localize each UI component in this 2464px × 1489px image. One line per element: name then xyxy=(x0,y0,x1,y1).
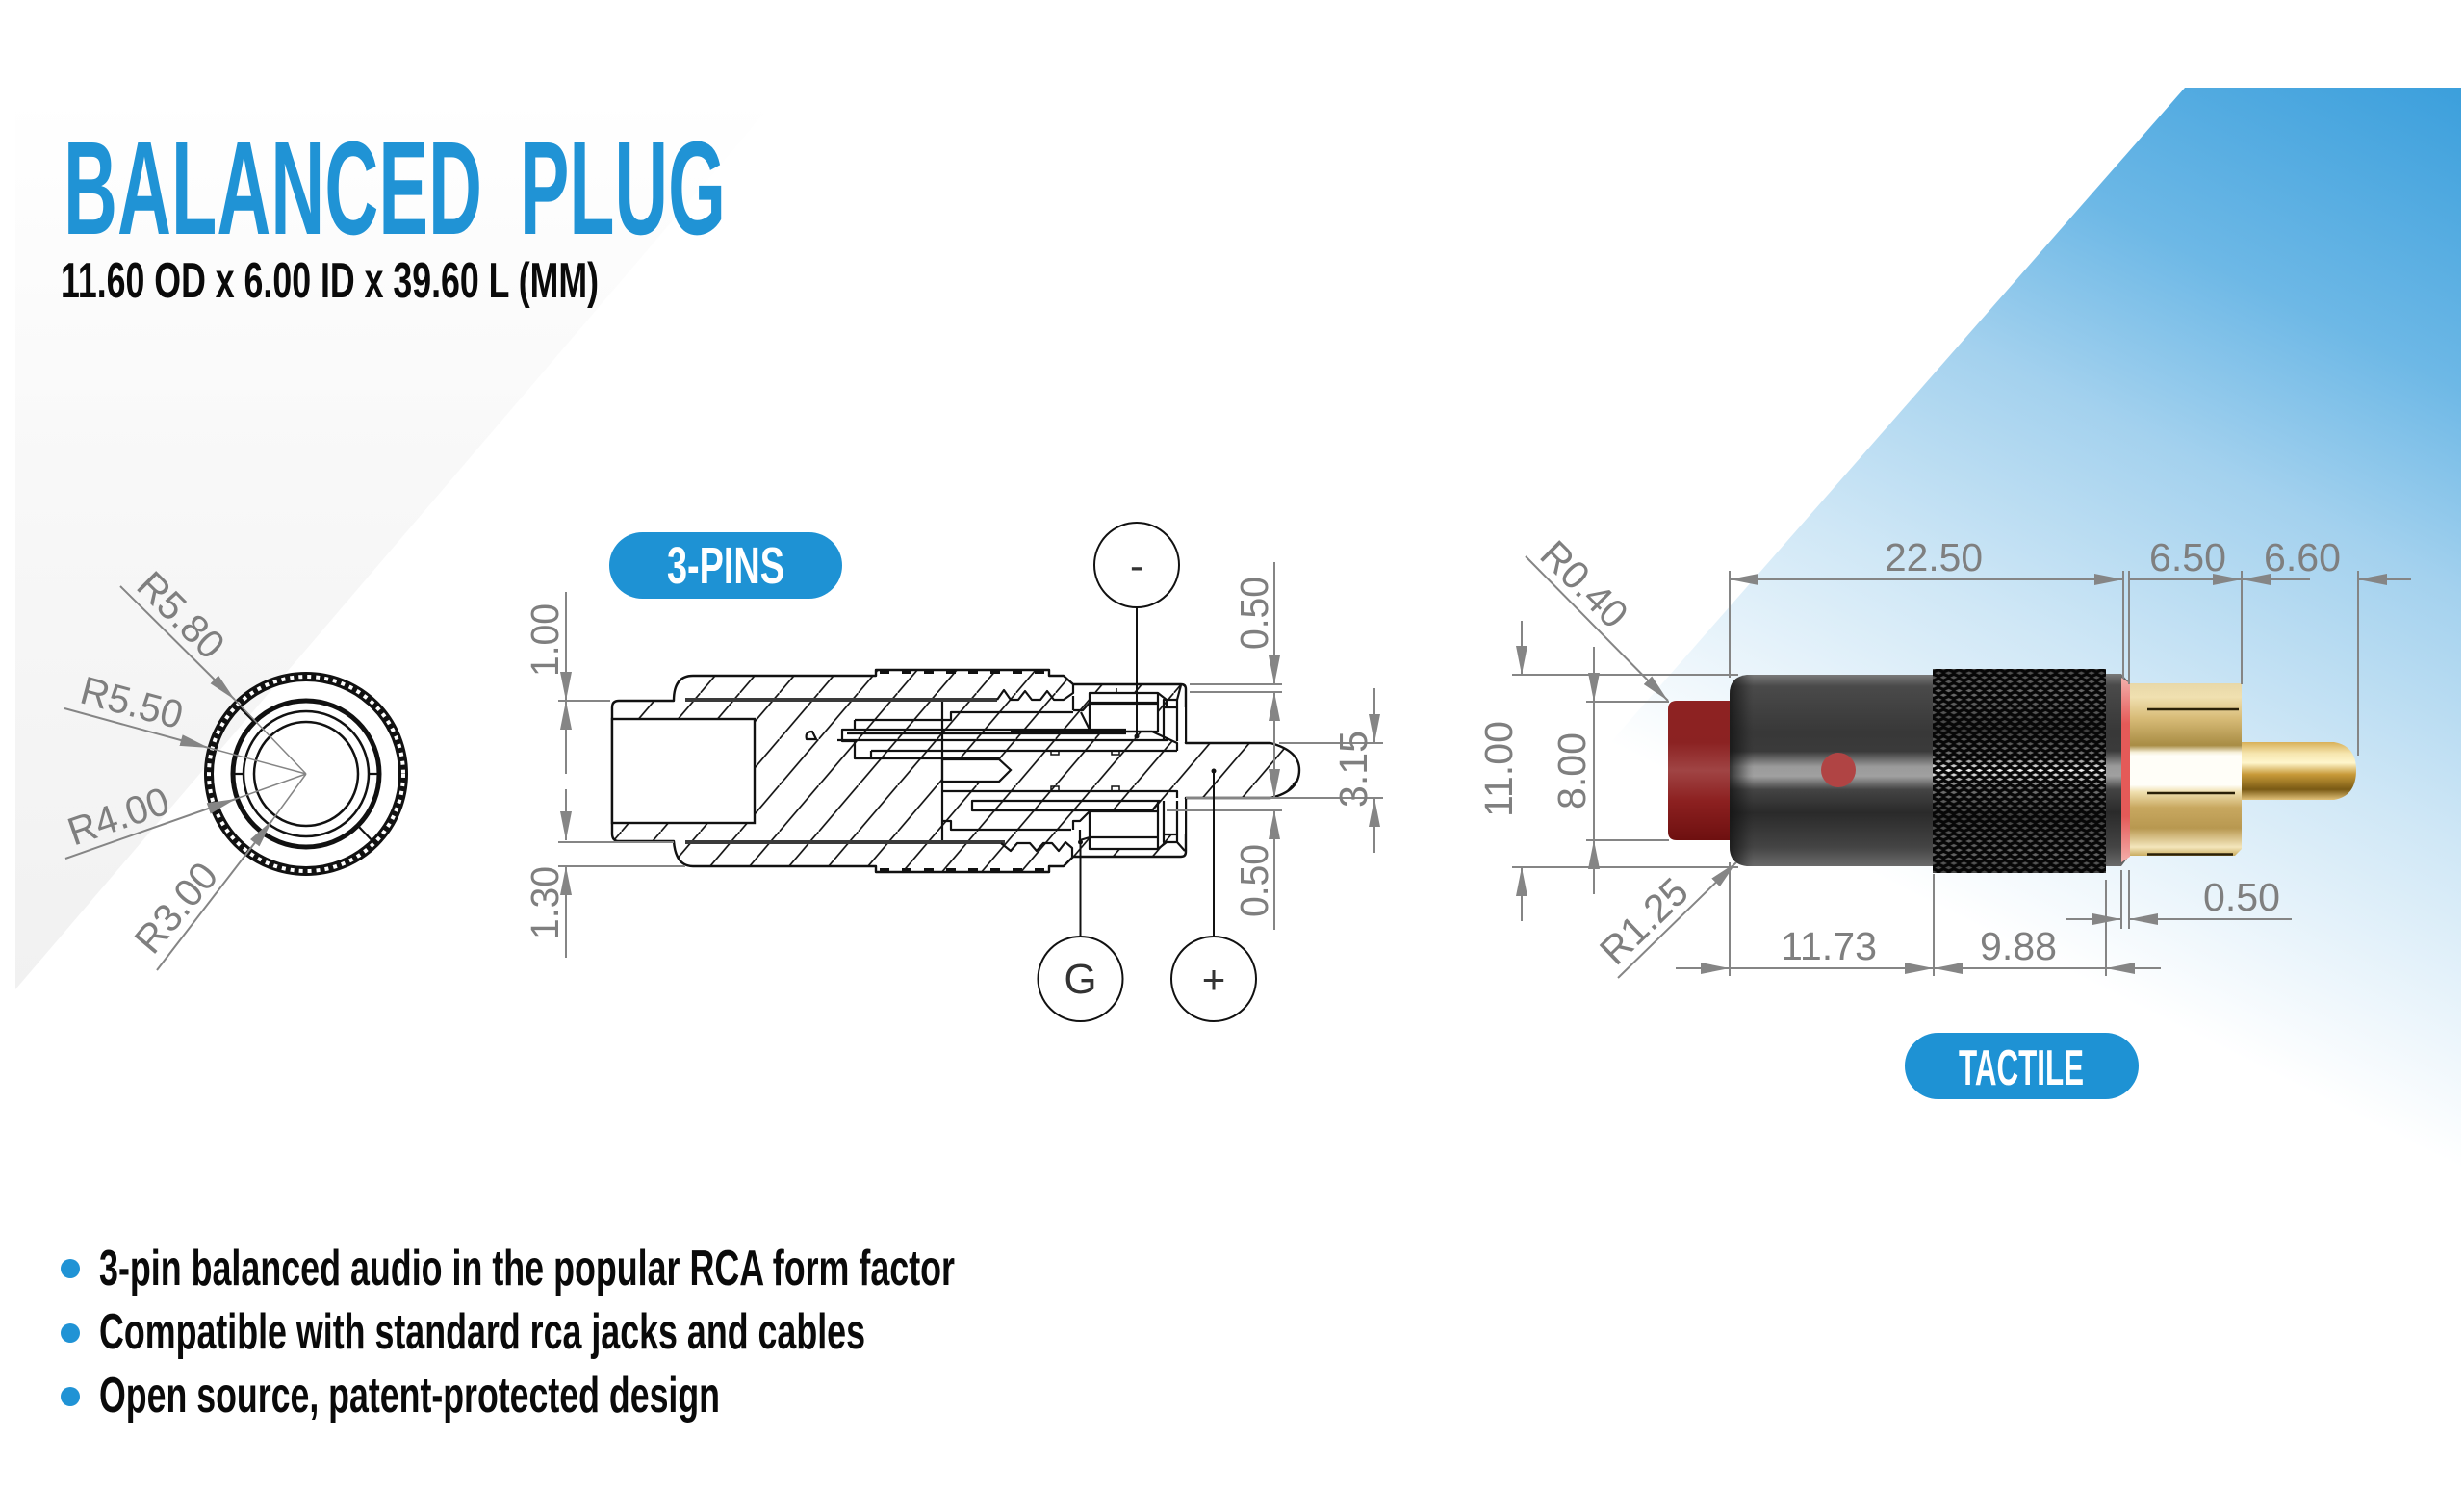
knurled grip xyxy=(1933,669,2106,873)
bullet 1: 3-pin balanced audio in the popular RCA form factor xyxy=(99,1241,955,1296)
rear collar xyxy=(2106,674,2130,866)
threads xyxy=(997,684,1073,857)
badge: 3-PINS xyxy=(609,532,842,599)
callout: minus pin xyxy=(1094,523,1179,739)
dimension 0.50 upper xyxy=(1190,562,1282,760)
dimension 6.50 xyxy=(2129,535,2242,579)
badge: 3-PINS: 3-PINS xyxy=(667,537,784,595)
label R5.50: R5.50 xyxy=(76,668,188,737)
dimension 1.00 xyxy=(523,592,685,866)
dimension 8.00 xyxy=(1550,647,1669,894)
callout: ground pin: G xyxy=(1064,956,1097,1003)
knurl teeth xyxy=(880,672,1047,870)
dimension 1.00: 1.00 xyxy=(523,603,567,677)
title: PLUG xyxy=(520,115,726,263)
dimension 3.15: 3.15 xyxy=(1331,731,1375,808)
dimension 11.73 xyxy=(1676,862,1934,976)
blue gradient background triangle xyxy=(1333,88,2461,1184)
bullet 3 xyxy=(61,1368,720,1424)
dimension R1.25 xyxy=(1591,862,1736,978)
grey background triangle xyxy=(15,88,786,989)
gold sleeve xyxy=(2130,683,2242,856)
dimension 8.00: 8.00 xyxy=(1550,732,1594,809)
dimension 3.15 xyxy=(1186,688,1383,853)
bullet 3: Open source, patent-protected design xyxy=(99,1368,720,1424)
callout: ground pin xyxy=(1038,839,1122,1021)
feature list xyxy=(61,1241,955,1424)
badge: TACTILE: TACTILE xyxy=(1959,1040,2084,1096)
dimension 0.50 lower: 0.50 xyxy=(1232,844,1276,917)
hatched section body xyxy=(612,670,1299,872)
dimension 6.60: 6.60 xyxy=(2264,535,2341,579)
subtitle: dimensions: 11.60 OD x 6.00 ID x 39.60 L (MM) xyxy=(61,253,599,309)
front cavity xyxy=(612,719,755,823)
dimension 11.00 xyxy=(1476,621,1738,921)
dimension 0.50: 0.50 xyxy=(2203,875,2280,919)
central cavity xyxy=(942,759,1011,782)
callout: minus pin: - xyxy=(1130,543,1143,588)
label R3.00: R3.00 xyxy=(126,854,226,962)
sleeve boundary bands xyxy=(685,698,1005,844)
dimension 22.50 xyxy=(1730,535,2358,756)
radius leader lines xyxy=(64,586,306,970)
inner section outlines xyxy=(807,702,1177,840)
dimension 0.50 xyxy=(2066,870,2292,929)
bullet 2: Compatible with standard rca jacks and cables xyxy=(99,1304,865,1360)
title: BALANCED xyxy=(64,115,482,263)
dimension 6.50: 6.50 xyxy=(2149,535,2226,579)
bullet 1 xyxy=(61,1241,955,1296)
end view rings xyxy=(209,677,403,871)
dimension 11.73: 11.73 xyxy=(1781,924,1877,968)
dimension 11.00: 11.00 xyxy=(1476,721,1521,817)
red end cap xyxy=(1668,701,1732,840)
bullet 2 xyxy=(61,1304,865,1360)
black body xyxy=(1730,675,1934,866)
dimension R1.25: R1.25 xyxy=(1591,869,1697,973)
dimension R0.40: R0.40 xyxy=(1532,532,1636,636)
plug pin xyxy=(2242,742,2356,800)
cross-section drawing xyxy=(523,523,1383,1021)
tactile plug render xyxy=(1668,669,2356,873)
dimension 1.30: 1.30 xyxy=(523,866,567,939)
callout: plus pin: + xyxy=(1202,957,1225,1002)
lower chamber xyxy=(1090,799,1185,849)
red ring xyxy=(2121,678,2130,862)
label R4.00: R4.00 xyxy=(62,779,175,854)
red indicator dot xyxy=(1821,753,1856,787)
dimension 0.50 upper: 0.50 xyxy=(1232,577,1276,650)
sleeve slots xyxy=(2147,709,2239,855)
end view drawing xyxy=(62,563,403,970)
label R5.80: R5.80 xyxy=(129,563,233,667)
dimension R0.40 xyxy=(1526,532,1668,701)
upper chamber xyxy=(1090,693,1185,742)
dimension 9.88: 9.88 xyxy=(1980,924,2057,968)
badge: TACTILE xyxy=(1905,1033,2139,1099)
dimension 22.50: 22.50 xyxy=(1885,535,1983,579)
callout: plus pin xyxy=(1171,768,1256,1021)
